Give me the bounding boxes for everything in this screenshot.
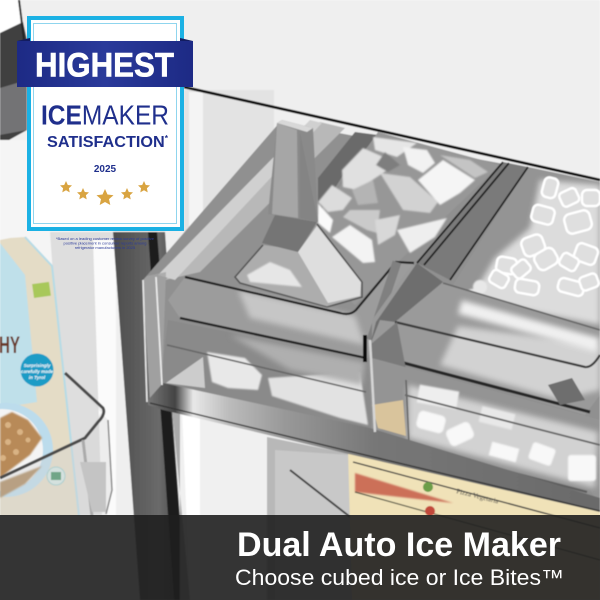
pizza boxes in lower drawer bbox=[267, 437, 600, 600]
blue seal: carefully made bbox=[21, 369, 54, 374]
bin divider rails bbox=[417, 162, 528, 280]
door gasket strip bbox=[113, 232, 268, 600]
pizza box seen through bin bbox=[372, 400, 406, 436]
blue seal: in Tyrol bbox=[29, 375, 46, 380]
door shelf bbox=[0, 373, 112, 516]
stars bbox=[60, 181, 150, 205]
lower right ice bbox=[415, 385, 596, 481]
cereal box bbox=[0, 237, 79, 516]
subheadline: Choose cubed ice or Ice Bites™ bbox=[235, 565, 564, 590]
right lower bin bbox=[372, 358, 600, 505]
blue seal: Surprisingly bbox=[24, 363, 51, 368]
pizza box text: Pizza Vegetaria bbox=[456, 487, 500, 506]
award badge bbox=[17, 18, 193, 229]
scoop handle bbox=[268, 120, 318, 222]
blue seal bbox=[20, 354, 54, 386]
bottom caption band bbox=[0, 515, 600, 600]
fine print under badge: *Based on a leading customer review survey of positive bbox=[56, 236, 155, 241]
lower left ice bbox=[207, 352, 262, 390]
left bin chrome edge bbox=[143, 272, 166, 403]
cereal bowl bbox=[0, 403, 53, 498]
HIGHEST: HIGHEST bbox=[35, 46, 174, 84]
fine print under badge: refrigerator manufacturers in 2025 bbox=[75, 245, 136, 250]
SATISFACTION: SATISFACTION bbox=[47, 134, 160, 151]
ribbon bbox=[17, 38, 193, 87]
ice maker bin body bbox=[143, 120, 600, 505]
right ice bites bbox=[450, 167, 600, 330]
headline: Dual Auto Ice Maker bbox=[237, 526, 561, 564]
ICEMAKER: ICEMAKER bbox=[41, 100, 169, 130]
upper edge of freezer compartment bbox=[184, 87, 600, 180]
left cubed ice bbox=[318, 132, 500, 305]
small seal bbox=[47, 467, 65, 485]
SATISFACTION: * bbox=[165, 134, 169, 143]
badge frame bbox=[29, 18, 182, 229]
scoop neck bbox=[262, 215, 317, 252]
product name fragment: HY bbox=[0, 332, 20, 359]
upper left bin front bbox=[168, 262, 414, 358]
fine print under badge bbox=[56, 236, 155, 250]
year: 2025 bbox=[94, 164, 117, 175]
ice cubes bbox=[318, 137, 488, 263]
scoop bbox=[235, 120, 362, 307]
left lower bin bbox=[160, 318, 372, 432]
right upper bin bbox=[370, 263, 600, 415]
scoop funnel bbox=[235, 224, 362, 307]
green label bbox=[32, 282, 51, 298]
fine print under badge: positive placement in consumer reports among bbox=[64, 240, 146, 246]
bottom chrome rim of bin bbox=[143, 277, 600, 512]
